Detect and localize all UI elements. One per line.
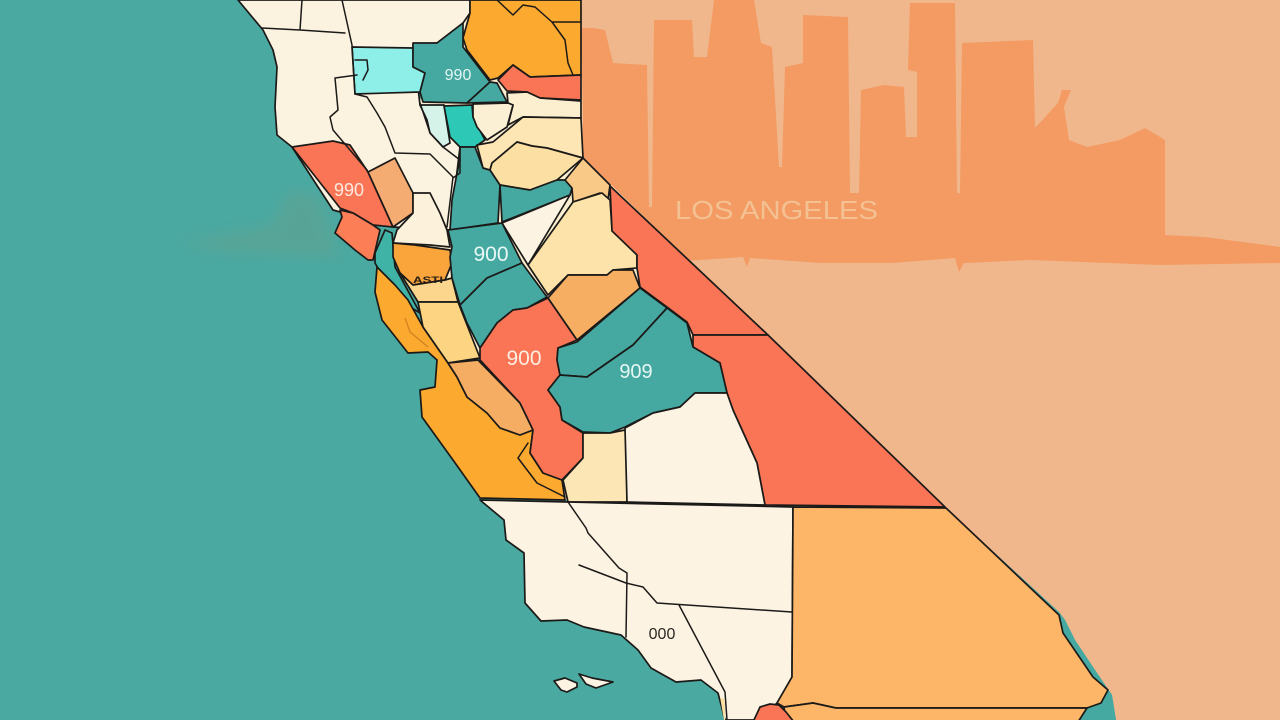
coastal tan sliver — [720, 697, 725, 720]
county: salmon lower coast — [335, 210, 380, 260]
county: pale cyan — [420, 105, 450, 147]
number label: 000 south: 000 — [649, 626, 675, 643]
county: cream bay lump — [393, 193, 450, 247]
number label: 909: 909 — [619, 361, 653, 383]
state land base — [395, 0, 946, 508]
county: cream triangle — [502, 195, 570, 265]
skyline label: Los Angeles: LOS ANGELES — [675, 195, 878, 225]
number label: 900 central: 900 — [473, 243, 509, 266]
county: teal with 990 — [413, 23, 490, 103]
county lines: north cream interior — [262, 0, 460, 227]
teal east edge — [1059, 612, 1116, 720]
faint skyline haze over ocean — [180, 190, 340, 258]
county: red east upper — [610, 186, 768, 335]
number label: 900 red county: 900 — [506, 347, 542, 370]
island: right — [579, 674, 613, 688]
faint orange contour — [405, 318, 428, 347]
small label on bay county: ASTI — [413, 275, 443, 285]
county: orange bay — [393, 243, 452, 285]
California county map — [238, 0, 1116, 720]
county: teal with 900 — [448, 223, 522, 305]
county: small cream — [473, 103, 513, 140]
county lines: south cream interior — [568, 502, 792, 720]
county: red bottom marker — [753, 704, 794, 720]
county: tan orange east — [565, 158, 610, 202]
county: red northeast — [498, 65, 581, 100]
county: teal with 909 — [548, 308, 727, 433]
county: red northwest coast with 990 — [292, 141, 393, 227]
county: tan orange center — [548, 270, 640, 340]
county: teal bay strip — [375, 230, 420, 313]
number label: 990 coast: 990 — [334, 180, 364, 200]
county group: far north top-right orange — [463, 0, 581, 80]
county: teal east — [500, 180, 572, 222]
number label: 990 north: 990 — [445, 67, 471, 84]
county: small teal triangle — [467, 82, 507, 103]
county: central red with 900 — [480, 298, 583, 480]
county: tan lower — [490, 142, 583, 190]
county: light orange long — [448, 360, 533, 435]
county: teal lower — [460, 263, 547, 348]
county: light tan — [528, 193, 637, 295]
county: central valley teal — [450, 147, 500, 230]
county: orange interior divider — [497, 0, 581, 75]
county: red east lower — [693, 335, 945, 507]
county: tan upper — [477, 117, 583, 170]
county: cream south center — [625, 393, 765, 505]
county group: north coast cream — [238, 0, 470, 230]
orange coastal inner lines — [518, 443, 565, 497]
county: teal band — [557, 288, 667, 377]
Los Angeles skyline silhouette — [581, 0, 1280, 272]
island: left — [554, 678, 577, 692]
county: tan south — [563, 430, 628, 502]
county: large orange southeast — [777, 507, 1108, 708]
county: cream northeast strip — [507, 92, 581, 125]
county: tan long — [418, 302, 480, 363]
county: turquoise — [444, 105, 485, 147]
county: cyan — [352, 47, 425, 94]
county: orange coastal — [375, 267, 565, 500]
county: light orange — [368, 158, 413, 227]
inland peach background — [581, 0, 1280, 720]
county: orange strip bottom — [784, 703, 1087, 720]
county group: south cream coast — [480, 500, 793, 720]
county: tan strip — [400, 273, 458, 302]
